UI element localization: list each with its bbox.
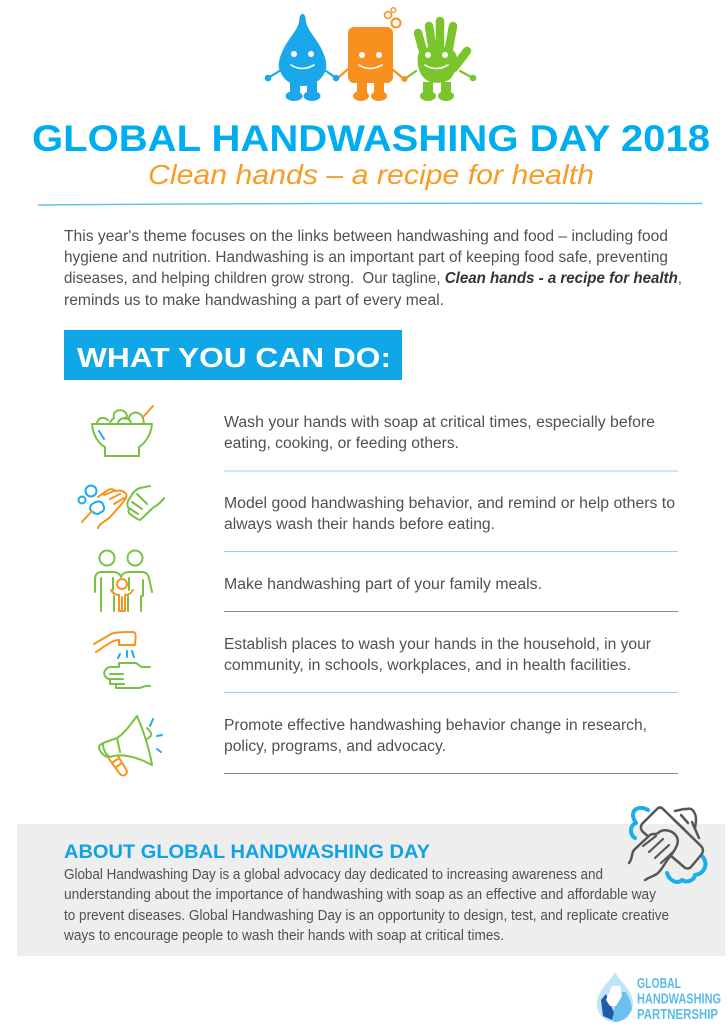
action 4: Establish places to wash your hands in the household, in your [224, 636, 651, 653]
section heading: what you can do [64, 330, 402, 380]
mascots: drop, soap and hand holding hands [265, 8, 476, 101]
about body text [63, 867, 669, 944]
action 4: community, in schools, workplaces, and in health facilities. [224, 657, 631, 674]
icon: family [95, 550, 152, 611]
logo wordmark [637, 975, 721, 1023]
icon: hands with soap bubbles [629, 808, 705, 882]
intro paragraph: reminds us to make handwashing a part of every meal. [64, 292, 444, 309]
header divider [38, 203, 702, 205]
icon: hands being washed [78, 486, 164, 528]
about body text: ways to encourage people to wash their hands with soap at critical times. [63, 928, 504, 944]
mascot: green hand [418, 21, 467, 101]
action 2: Model good handwashing behavior, and remind or help others to [224, 495, 675, 512]
subtitle: Clean hands – a recipe for health [148, 159, 594, 190]
action 1: eating, cooking, or feeding others. [224, 435, 459, 452]
title: GLOBAL HANDWASHING DAY 2018 [32, 118, 710, 159]
mascot arms [268, 69, 473, 79]
intro paragraph: hygiene and nutrition. Handwashing is an important part of keeping food safe, preventing [64, 249, 668, 266]
action 4 [224, 636, 651, 674]
about body text: Global Handwashing Day is a global advocacy day dedicated to increasing awareness and [64, 867, 603, 883]
logo mark: water drop with hands [597, 972, 633, 1022]
icon: tap and hand [94, 632, 150, 688]
about heading: ABOUT GLOBAL HANDWASHING DAY [64, 842, 430, 863]
action 5: Promote effective handwashing behavior change in research, [224, 717, 647, 734]
action 2: always wash their hands before eating. [224, 516, 495, 533]
panel: about global handwashing day [17, 824, 725, 956]
action 5: policy, programs, and advocacy. [224, 738, 446, 755]
logo: global handwashing partnership [597, 972, 721, 1023]
mascot: water drop [279, 14, 326, 101]
icon: megaphone [99, 716, 162, 775]
mascot: soap bar [348, 8, 400, 101]
action 5 [224, 717, 647, 755]
action 2 [224, 495, 675, 533]
action 1: Wash your hands with soap at critical times, especially before [224, 414, 655, 431]
about body text: to prevent diseases. Global Handwashing Day is an opportunity to design, test, and replicate creative [64, 908, 669, 924]
intro paragraph: This year's theme focuses on the links between handwashing and food – including food [64, 228, 668, 245]
action 1 [224, 414, 655, 452]
intro paragraph: diseases, and helping children grow strong. Our tagline, Clean hands - a recipe for health, [64, 270, 682, 287]
intro paragraph [64, 228, 682, 309]
logo wordmark: GLOBAL [637, 975, 681, 992]
icon: bowl of food [92, 406, 153, 456]
about body text: understanding about the importance of handwashing with soap as an effective and affordable way [64, 887, 657, 903]
action 3: Make handwashing part of your family meals. [224, 576, 542, 593]
section heading: what you can do: WHAT YOU CAN DO: [77, 342, 391, 373]
